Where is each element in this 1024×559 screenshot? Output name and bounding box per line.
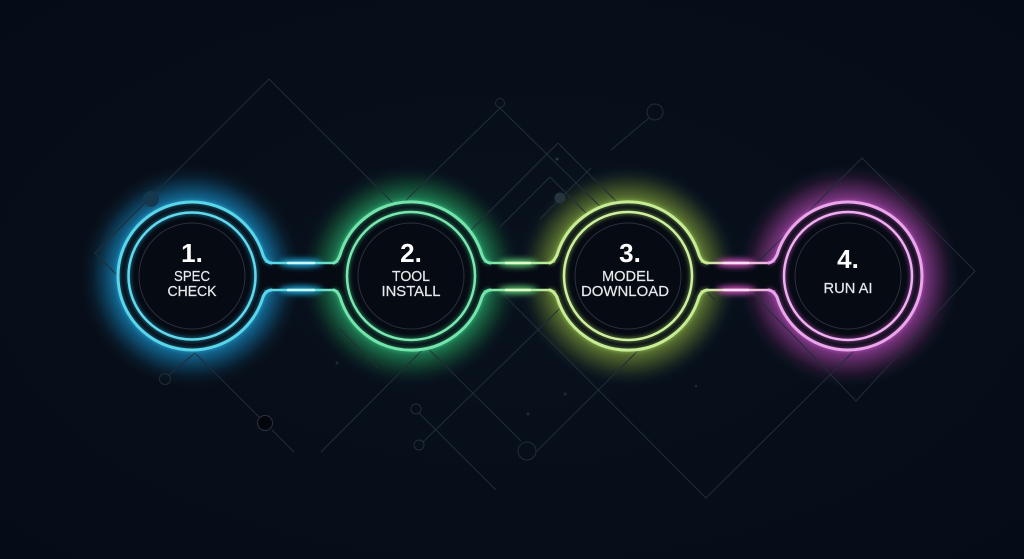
step 3 rings — [549, 202, 708, 350]
step 1 label: SPEC — [174, 268, 210, 285]
step 2 label: INSTALL — [382, 283, 440, 300]
step 1 label: 1. — [181, 238, 203, 268]
step 3 label: 3. — [619, 238, 641, 268]
step 3 label: MODEL — [602, 268, 654, 285]
step 2 label — [382, 238, 440, 300]
step 4 rings — [768, 202, 922, 350]
step 2 label: 2. — [400, 238, 422, 268]
step 3 label: DOWNLOAD — [581, 283, 669, 300]
step 4 label: RUN AI — [824, 280, 872, 297]
step 1 label: CHECK — [168, 283, 216, 300]
step 1: spec check — [118, 202, 272, 350]
step 1 rings — [118, 202, 272, 350]
step 2: tool install — [333, 202, 491, 350]
connector: step 3 to step 4 — [706, 259, 770, 294]
step 1 label — [168, 238, 216, 300]
step 3 label — [581, 238, 669, 300]
dark circle bodies and connector channels — [118, 202, 922, 350]
connector: step 2 to step 3 — [489, 259, 551, 294]
neon tube glow — [118, 202, 922, 350]
step 4 label — [824, 244, 872, 297]
step 2 rings — [333, 202, 491, 350]
background geometric network lines — [95, 79, 975, 498]
connector: step 1 to step 2 — [270, 259, 335, 294]
colored halos behind the rings — [80, 164, 960, 388]
step 3: model download — [549, 202, 708, 350]
step 4: run AI — [768, 202, 922, 350]
step 2 label: TOOL — [392, 268, 430, 285]
step 4 label: 4. — [837, 244, 859, 274]
